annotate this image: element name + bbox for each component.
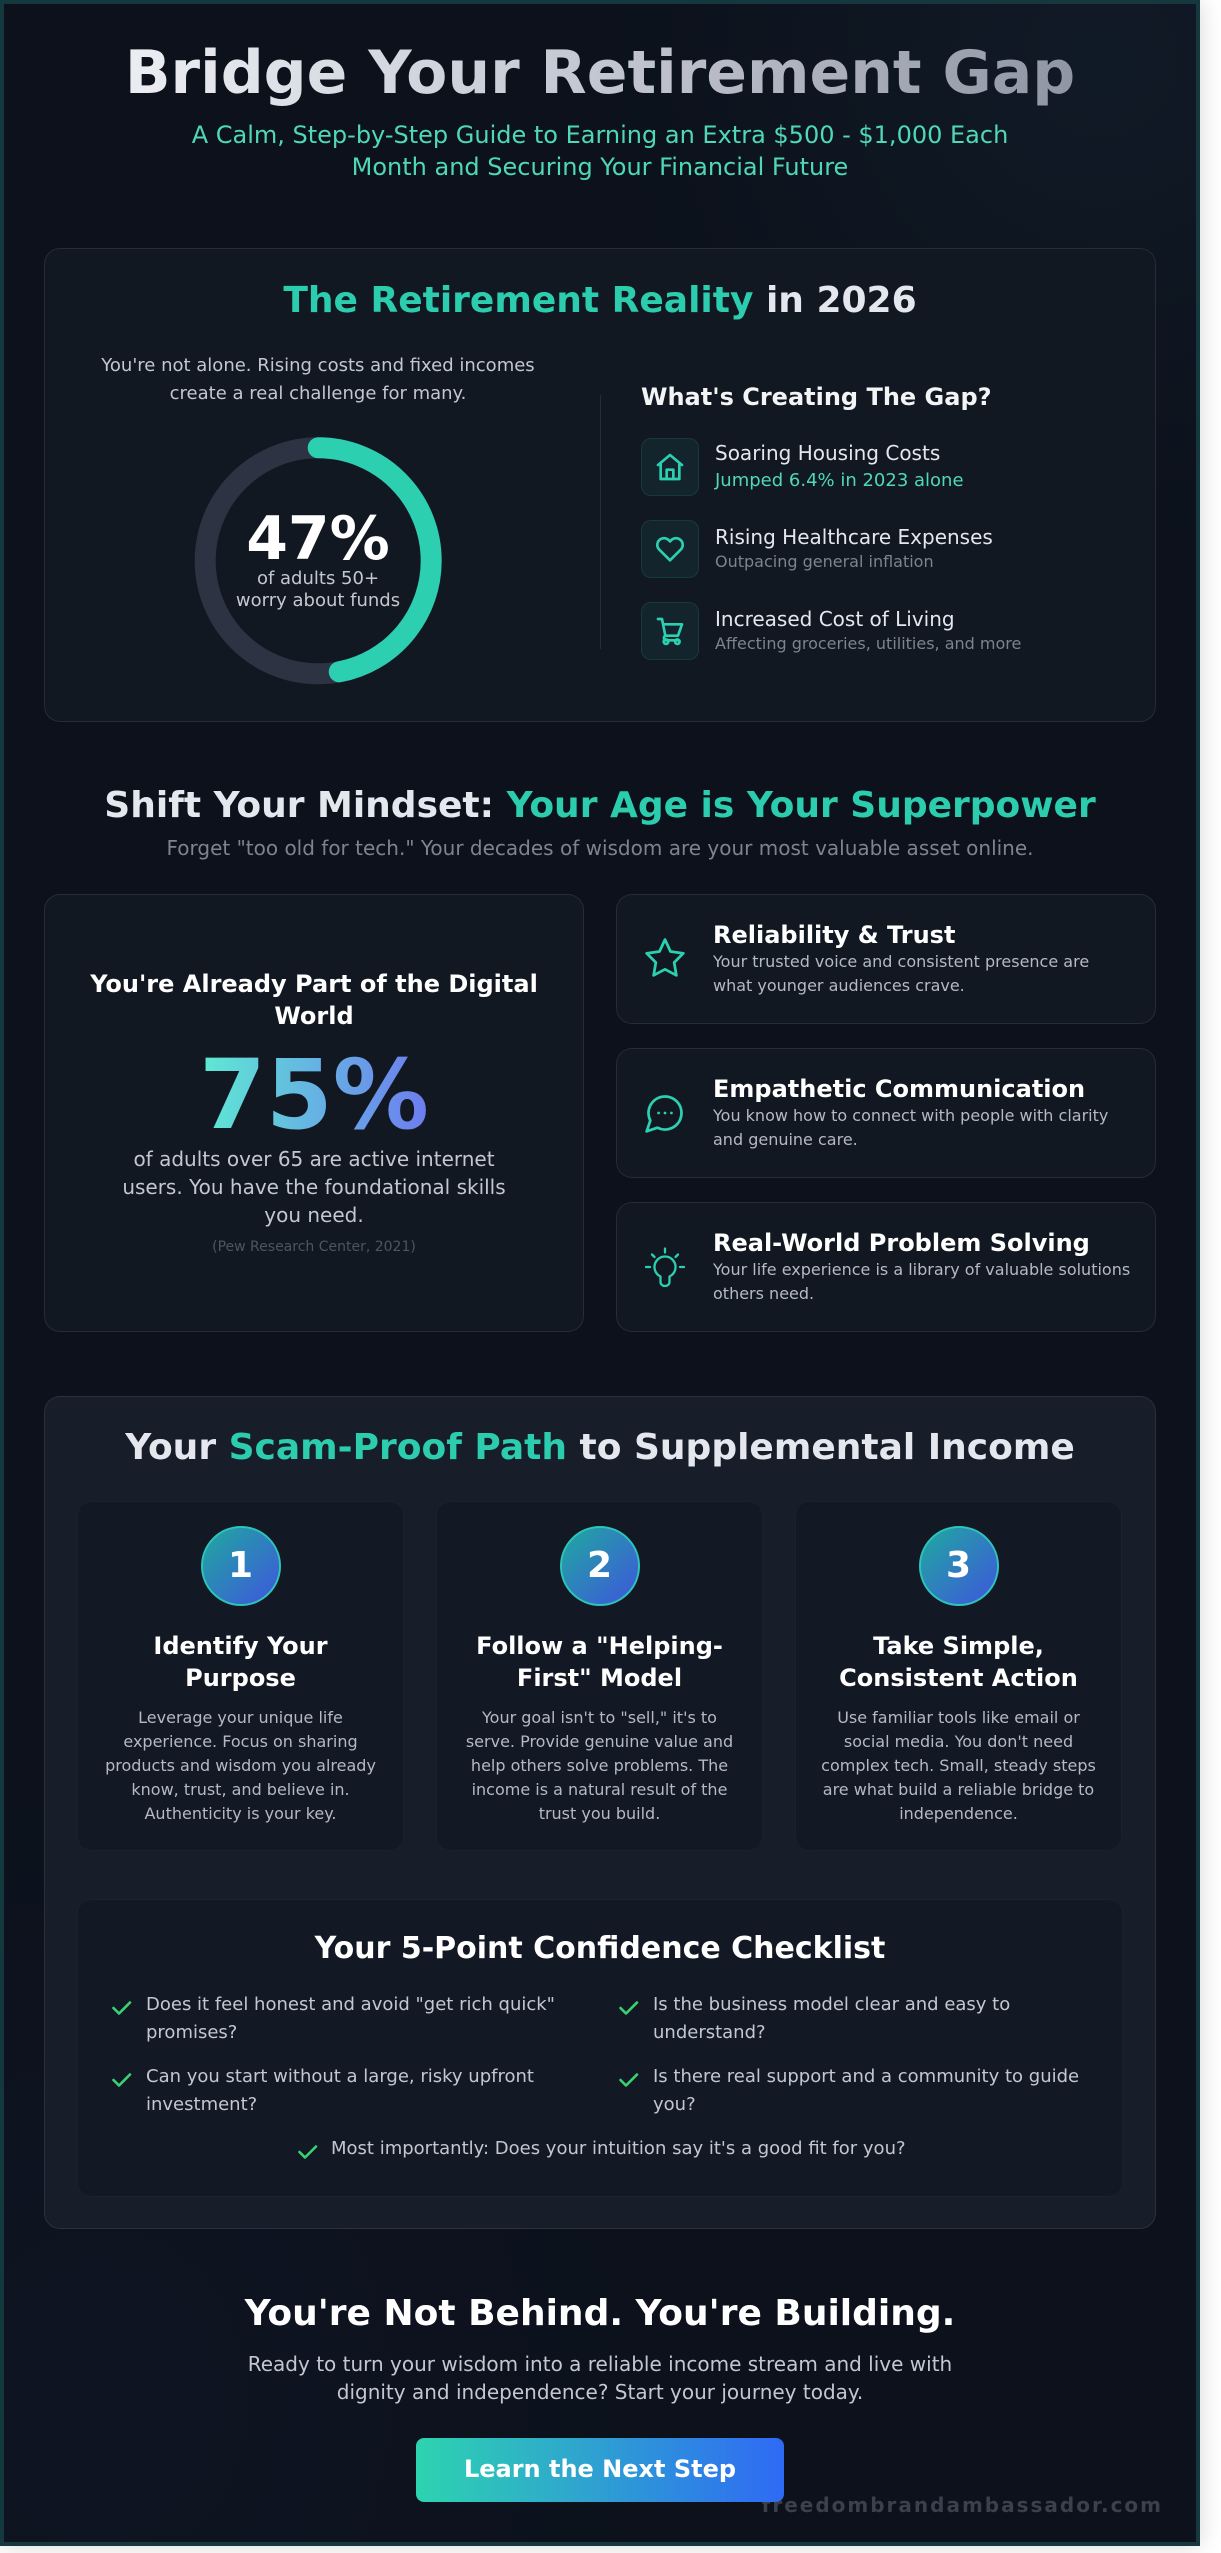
step 3 text: independence. [899, 1804, 1018, 1823]
checklist item 4 [619, 2066, 1079, 2115]
check mark [619, 2001, 638, 2015]
stat caption: of adults 50+ [257, 568, 379, 589]
gap item: healthcare: Rising Healthcare Expenses [715, 525, 993, 549]
step 1 title: Purpose [185, 1664, 296, 1692]
item text: Does it feel honest and avoid "get rich quick" [146, 1994, 555, 2015]
step 3 title [839, 1632, 1078, 1692]
divider [600, 395, 601, 649]
gap detail: cost of living: Affecting groceries, utilities, and more [715, 634, 1021, 653]
gap detail: healthcare: Outpacing general inflation [715, 552, 934, 571]
step 3 text: social media. You don't need [844, 1732, 1073, 1751]
stat: 75%: 75% [199, 1039, 429, 1151]
card text [713, 1260, 1130, 1303]
step 2 text: income is a natural result of the [472, 1780, 727, 1799]
step 1 title [153, 1632, 328, 1692]
step 2 text: serve. Provide genuine value and [466, 1732, 733, 1751]
panel: 75% stat [44, 894, 584, 1332]
card text [713, 1106, 1108, 1149]
item text: Most importantly: Does your intuition say it's a good fit for you? [331, 2138, 906, 2159]
item text: promises? [146, 2022, 237, 2043]
step 1 card [77, 1501, 404, 1851]
icon: light bulb [644, 1247, 686, 1288]
call to action button: Learn the Next Step [464, 2455, 736, 2483]
card text: Your life experience is a library of valuable solutions [713, 1260, 1130, 1279]
card heading: World [274, 1002, 354, 1030]
intro text [101, 355, 535, 404]
closing text: dignity and independence? Start your journey today. [337, 2380, 863, 2404]
step 1 text: products and wisdom you already [105, 1756, 376, 1775]
card title: Real-World Problem Solving [713, 1229, 1090, 1257]
subtitle: Month and Securing Your Financial Future [352, 153, 848, 181]
stat description: of adults over 65 are active internet [133, 1147, 495, 1171]
item text [653, 2066, 1079, 2115]
icon: chat bubble [645, 1095, 683, 1133]
item text: you? [653, 2094, 696, 2115]
gap detail: housing: Jumped 6.4% in 2023 alone [715, 470, 964, 491]
step 2 title: First" Model [517, 1664, 682, 1692]
step 2 card [436, 1501, 763, 1851]
panel: real-world problem solving [616, 1202, 1156, 1332]
heading: scam-proof path: Your Scam-Proof Path to Supplemental Income [125, 1427, 1075, 1468]
card title: Empathetic Communication [713, 1075, 1085, 1103]
panel: retirement reality [44, 248, 1156, 722]
source note: (Pew Research Center, 2021) [212, 1239, 416, 1255]
checklist item 3 [112, 2066, 534, 2115]
stat caption: worry about funds [236, 590, 400, 611]
step number 3: 3 [946, 1545, 971, 1586]
step 3 text: complex tech. Small, steady steps [821, 1756, 1096, 1775]
step 2 text: help others solve problems. The [471, 1756, 728, 1775]
card text: others need. [713, 1284, 814, 1303]
item text: Can you start without a large, risky upfront [146, 2066, 534, 2087]
card text: Your trusted voice and consistent presence are [713, 952, 1089, 971]
panel: reliability & trust [616, 894, 1156, 1024]
step 1 text: Authenticity is your key. [144, 1804, 336, 1823]
icon: star [645, 938, 685, 977]
panel: confidence checklist [77, 1899, 1123, 2197]
panel: scam-proof path [44, 1396, 1156, 2229]
mindset subheading: Forget "too old for tech." Your decades of wisdom are your most valuable asset online. [166, 836, 1034, 860]
step number 1: 1 [228, 1545, 253, 1586]
checklist heading: Your 5-Point Confidence Checklist [315, 1931, 885, 1966]
step 1 text: Leverage your unique life [138, 1708, 343, 1727]
card text: and genuine care. [713, 1130, 858, 1149]
donut chart: 47% [194, 437, 442, 684]
stat description [122, 1147, 506, 1227]
stat description: users. You have the foundational skills [122, 1175, 506, 1199]
check mark [298, 2145, 318, 2159]
heading: shift your mindset: Shift Your Mindset: Your Age is Your Superpower [104, 785, 1096, 826]
item text [146, 1994, 555, 2043]
panel: empathetic communication [616, 1048, 1156, 1178]
card text: what younger audiences crave. [713, 976, 965, 995]
icon: cart [641, 602, 699, 660]
check mark [112, 2001, 132, 2015]
item text: understand? [653, 2022, 766, 2043]
step 3 title: Consistent Action [839, 1664, 1078, 1692]
subtitle [192, 121, 1008, 181]
icon: heart [641, 520, 699, 578]
step number 2 [560, 1526, 640, 1606]
item text: Is there real support and a community to guide [653, 2066, 1079, 2087]
item text: investment? [146, 2094, 257, 2115]
card text [713, 952, 1089, 995]
gap item: cost of living: Increased Cost of Living [715, 607, 955, 631]
step 1 text: experience. Focus on sharing [123, 1732, 358, 1751]
icon: house [641, 438, 699, 496]
item text [653, 1994, 1010, 2043]
step 3 text: are what build a reliable bridge to [823, 1780, 1094, 1799]
step 1 title: Identify Your [153, 1632, 328, 1660]
watermark: freedombrandambassador.com [762, 2493, 1163, 2517]
heading: retirement reality: The Retirement Reality in 2026 [283, 280, 917, 321]
step 3 text: Use familiar tools like email or [837, 1708, 1080, 1727]
card heading: You're Already Part of the Digital [90, 970, 538, 998]
intro text: create a real challenge for many. [170, 383, 466, 404]
step 2 text: Your goal isn't to "sell," it's to [482, 1708, 717, 1727]
item text: Is the business model clear and easy to [653, 1994, 1010, 2015]
checklist item 2 [619, 1994, 1010, 2043]
step number 1 [200, 1526, 280, 1606]
step 2 title [476, 1632, 723, 1692]
stat description: you need. [264, 1203, 364, 1227]
card text: You know how to connect with people with clarity [713, 1106, 1108, 1125]
step 3 title: Take Simple, [873, 1632, 1044, 1660]
step 2 text: trust you build. [539, 1804, 660, 1823]
closing text: Ready to turn your wisdom into a reliable income stream and live with [248, 2352, 952, 2376]
check mark [112, 2073, 132, 2087]
step 3 text [821, 1708, 1096, 1823]
subtitle: A Calm, Step-by-Step Guide to Earning an Extra $500 - $1,000 Each [192, 121, 1008, 149]
intro text: You're not alone. Rising costs and fixed incomes [101, 355, 535, 376]
stat: 47%: 47% [246, 504, 390, 574]
closing heading: You're Not Behind. You're Building. [245, 2293, 955, 2334]
step 2 title: Follow a "Helping- [476, 1632, 723, 1660]
step 3 card [795, 1501, 1122, 1851]
step 2 text [466, 1708, 733, 1823]
closing text [248, 2352, 952, 2404]
item text [146, 2066, 534, 2115]
step 1 text [105, 1708, 376, 1823]
checklist item 5 [298, 2138, 906, 2159]
title: Bridge Your Retirement Gap [125, 38, 1075, 108]
step number 2: 2 [587, 1545, 612, 1586]
card title: Reliability & Trust [713, 921, 955, 949]
check mark [619, 2073, 638, 2087]
step 1 text: know, trust, and believe in. [131, 1780, 350, 1799]
call to action button [416, 2438, 784, 2502]
step number 3 [918, 1526, 998, 1606]
stat caption [236, 568, 400, 611]
gap item: housing: Soaring Housing Costs [715, 441, 940, 465]
card heading [90, 970, 538, 1030]
checklist item 1 [112, 1994, 555, 2043]
heading: what's creating the gap: What's Creating The Gap? [641, 383, 992, 411]
